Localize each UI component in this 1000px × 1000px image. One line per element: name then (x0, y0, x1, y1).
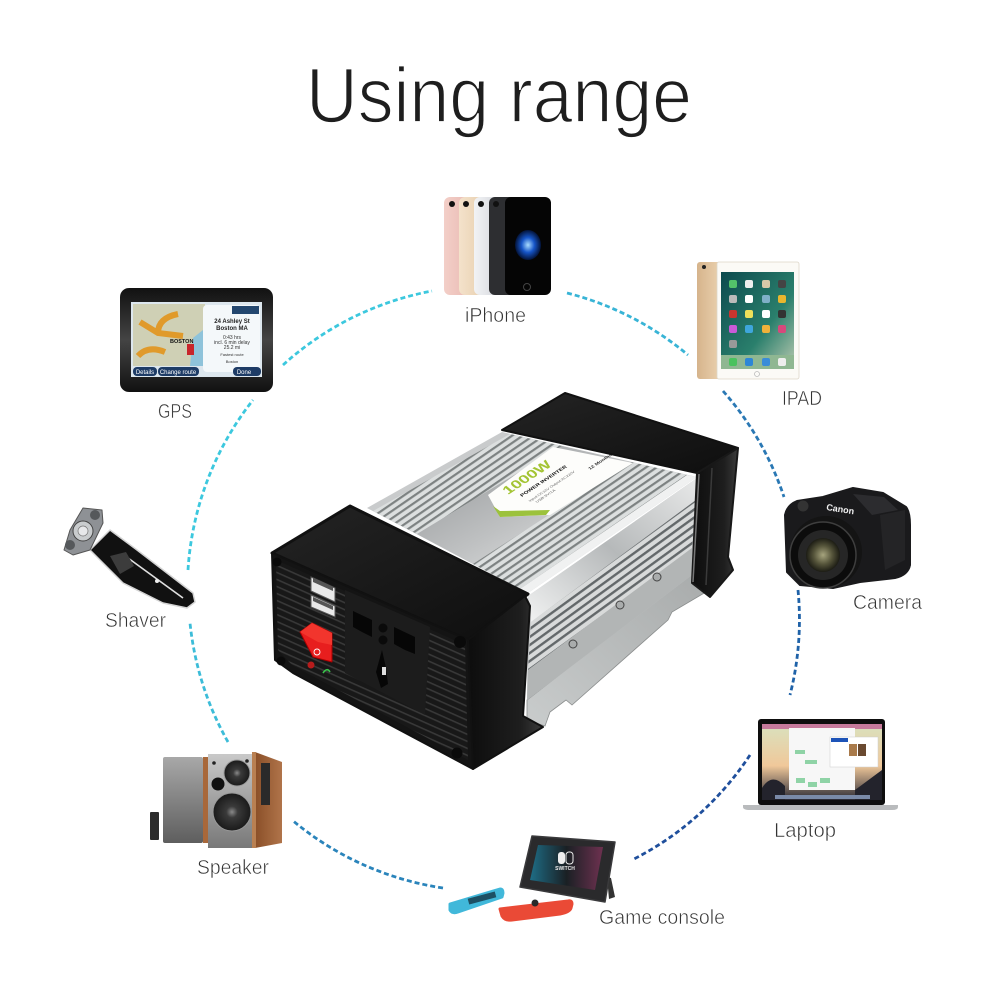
USB ports (311, 577, 335, 617)
title: Using range (306, 51, 692, 139)
rear end cap (502, 393, 738, 597)
icon: laptop (743, 719, 898, 810)
icon: GPS navigator: Boston MA (216, 326, 248, 332)
power switch (300, 623, 332, 662)
product label: Input:DC12V Output:AC220V (528, 470, 576, 503)
mounting plate (527, 572, 706, 726)
product label: USB:5V/1A (534, 488, 557, 504)
icon: GPS navigator: Fastest route (220, 352, 244, 357)
icon: speakers (150, 752, 282, 848)
icon: GPS navigator: Boston (226, 359, 238, 364)
central product: power inverter (272, 393, 738, 769)
product label: 12 Months (587, 453, 614, 471)
label: IPAD: IPAD (782, 388, 822, 410)
icon: GPS navigator: Done (237, 370, 252, 376)
universal socket (345, 590, 430, 715)
icon: GPS navigator (120, 288, 273, 392)
icon: iPhones (444, 197, 551, 295)
indicator lights (308, 662, 330, 673)
label: Laptop: Laptop (774, 820, 836, 842)
front end cap side (468, 596, 543, 769)
front panel (272, 553, 473, 769)
label: Game console: Game console (599, 907, 725, 929)
icon: GPS navigator: 25.2 mi (224, 345, 240, 351)
product label: POWER INVERTER (519, 465, 569, 498)
label: Shaver: Shaver (105, 610, 166, 632)
icon: GPS navigator: 0:43 hrs (223, 335, 242, 341)
icon: GPS navigator: incl. 6 min delay (214, 340, 250, 346)
dashed ring connecting devices (188, 291, 799, 888)
icon: shaver (64, 508, 195, 608)
icon: GPS navigator: BOSTON (170, 339, 193, 345)
aluminium top face (367, 432, 697, 593)
product label (488, 447, 633, 517)
front end cap top (272, 506, 528, 640)
icon: camera: Canon (826, 502, 855, 516)
aluminium side face with fins and bolts (527, 478, 697, 700)
icon: GPS navigator: Details (136, 370, 154, 376)
label: GPS: GPS (158, 401, 192, 423)
label: Speaker: Speaker (197, 857, 269, 879)
label: Camera: Camera (853, 592, 923, 614)
icon: GPS navigator: Change route (160, 370, 197, 376)
label: iPhone: iPhone (465, 305, 526, 327)
icon: game console (450, 836, 615, 920)
product label: 1000W (499, 458, 556, 497)
icon: game console: SWITCH (555, 866, 575, 872)
icon: camera (785, 488, 910, 588)
icon: GPS navigator: 24 Ashley St (214, 319, 250, 325)
icon: iPad (697, 262, 799, 379)
